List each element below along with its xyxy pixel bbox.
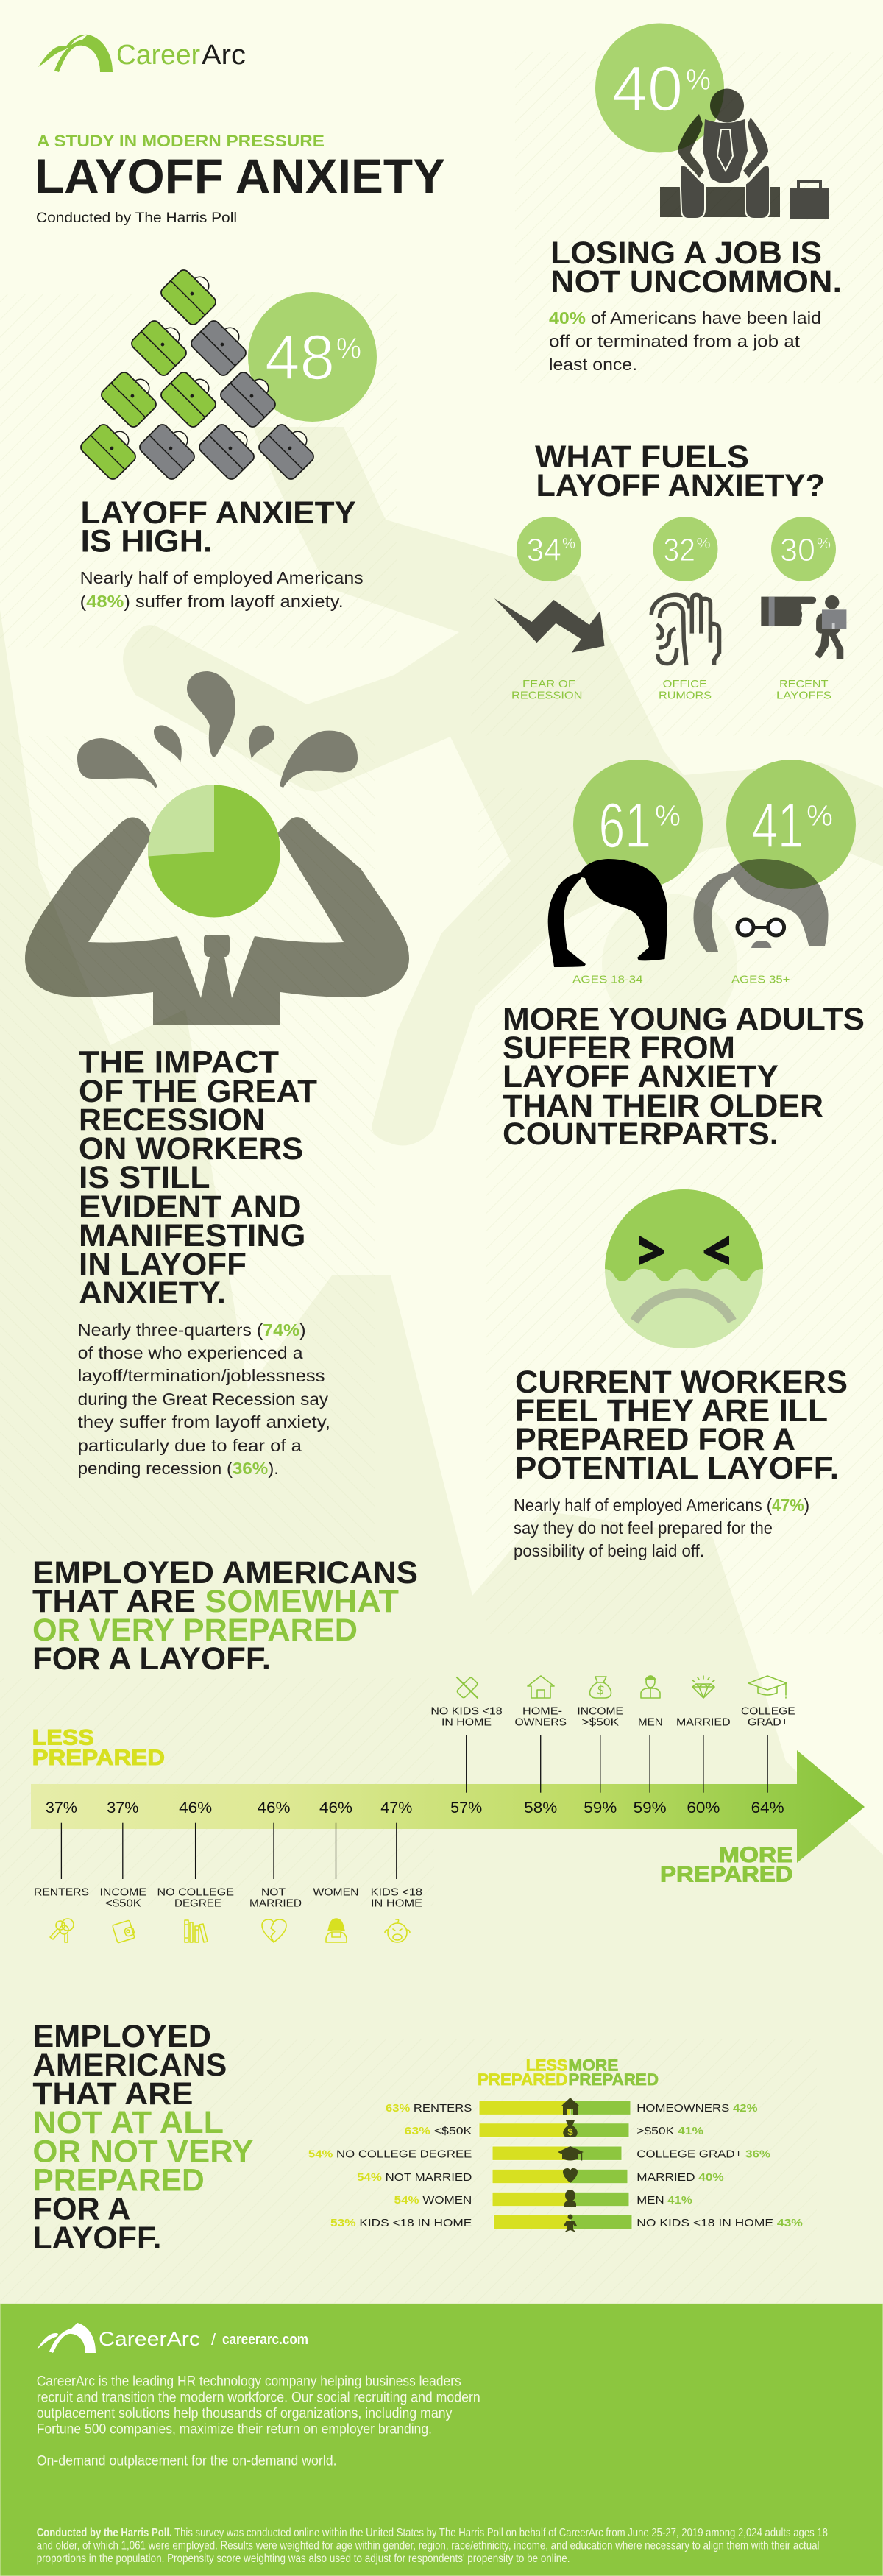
percentages: 46% — [319, 1800, 352, 1816]
upper labels: MARRIED — [676, 1716, 731, 1729]
icon grid: briefcases — [79, 263, 321, 481]
stat circle: 40%: % — [686, 64, 711, 96]
text block: layoff anxiety is high: (48%) suffer from layoff anxiety. — [80, 592, 344, 611]
text block: impact of the great recession: Nearly three-quarters ( 74%) — [78, 1320, 306, 1340]
text block: more young adults: SUFFER FROM — [503, 1031, 735, 1066]
right labels: MARRIED 40% — [636, 2171, 724, 2184]
text block: impact of the great recession: pending recession ( 36%). — [78, 1459, 279, 1478]
text block: layoff anxiety is high — [80, 496, 364, 611]
stat: office rumors 32%: OFFICE — [663, 678, 707, 690]
left labels: 54% NO COLLEGE DEGREE — [308, 2148, 472, 2161]
heading: not at all or not very prepared: PREPARED — [32, 2164, 205, 2198]
stat circle: ages 35+ 41%: % — [806, 800, 833, 832]
heading: not at all or not very prepared: OR NOT VERY — [32, 2135, 253, 2170]
figure: arms, torso and tie — [25, 817, 409, 1025]
illustration: stressed worker with pie chart head — [25, 671, 409, 1025]
text block: more young adults: MORE YOUNG ADULTS — [503, 1002, 865, 1037]
stat: recent layoffs 30% — [761, 517, 846, 702]
percentages: 59% — [634, 1800, 667, 1816]
title block: A STUDY IN MODERN PRESSURE — [37, 132, 325, 150]
stat circle: ages 35+ 41%: AGES 35+ — [731, 974, 790, 986]
icons: less prepared groups — [50, 1919, 410, 1943]
stat circle: ages 18-34 61%: 61 — [599, 790, 651, 861]
stat: fear of recession 34%: RECESSION — [511, 689, 583, 702]
logo: CareerArc: Arc — [202, 40, 246, 71]
text block: current workers: CURRENT WORKERS — [515, 1365, 848, 1400]
percentages: 37% — [107, 1800, 138, 1816]
left labels: 53% KIDS <18 IN HOME — [330, 2217, 472, 2229]
stat circle: ages 35+ 41%: 41 — [752, 790, 804, 861]
text block: losing a job: NOT UNCOMMON. — [550, 265, 842, 300]
left labels: 63% <$50K — [405, 2125, 472, 2137]
label: more prepared — [660, 1843, 793, 1887]
text block: current workers: FEEL THEY ARE ILL — [515, 1394, 828, 1429]
text block: current workers: Nearly half of employed Americans (47%) — [514, 1496, 809, 1515]
upper labels: INCOME — [577, 1705, 623, 1717]
upper labels: COLLEGE — [741, 1705, 795, 1717]
text block: impact of the great recession: EVIDENT AND — [79, 1190, 302, 1225]
footer logo: careerarc.com — [222, 2332, 308, 2348]
footer methodology note — [37, 2527, 828, 2565]
text block: losing a job: off or terminated from a job at — [549, 331, 801, 350]
footer panel — [0, 2304, 883, 2576]
heading: not at all or not very prepared: EMPLOYED — [32, 2020, 211, 2054]
upper labels: OWNERS — [515, 1716, 567, 1729]
label: less prepared: PREPARED — [32, 1746, 165, 1770]
heading: not at all or not very prepared: LAYOFF. — [32, 2221, 161, 2256]
heading: not at all or not very prepared — [32, 2020, 253, 2256]
stat: fear of recession 34% — [494, 517, 605, 702]
lower labels: KIDS <18 — [371, 1886, 422, 1899]
lower labels: NO COLLEGE — [157, 1886, 234, 1899]
lower labels: DEGREE — [174, 1897, 221, 1910]
text block: layoff anxiety is high: IS HIGH. — [81, 524, 212, 559]
upper labels: IN HOME — [442, 1716, 492, 1729]
text block: losing a job: LOSING A JOB IS — [550, 236, 822, 271]
percentages: 46% — [179, 1800, 212, 1816]
text block: impact of the great recession: they suffer from layoff anxiety, — [78, 1412, 330, 1432]
text block: losing a job — [549, 236, 842, 374]
icon: anxious face — [605, 1189, 763, 1348]
text block: impact of the great recession: particularly due to fear of a — [78, 1436, 302, 1455]
footer description — [37, 2374, 480, 2469]
right labels: >$50K 41% — [636, 2125, 703, 2137]
connector lines — [61, 1735, 767, 1879]
heading: somewhat or very prepared: THAT ARE SOMEWHAT — [32, 1585, 399, 1619]
footer logo: / — [211, 2330, 216, 2349]
bars — [479, 2101, 632, 2229]
bar icons — [558, 2098, 584, 2232]
stat: fear of recession 34%: 34 — [527, 532, 561, 568]
right labels — [636, 2102, 803, 2229]
lower labels: <$50K — [105, 1897, 141, 1910]
text block: impact of the great recession: during the Great Recession say — [78, 1390, 329, 1409]
text block: impact of the great recession: ON WORKERS — [79, 1132, 303, 1167]
text block: layoff anxiety is high: Nearly half of employed Americans — [80, 568, 364, 587]
percentages: 59% — [584, 1800, 617, 1816]
stat circle: ages 18-34 61%: AGES 18-34 — [572, 974, 643, 986]
upper labels: HOME- — [522, 1705, 562, 1717]
heading: somewhat or very prepared: OR VERY PREPARED — [32, 1613, 358, 1648]
percentages: 57% — [450, 1800, 482, 1816]
upper labels: NO KIDS <18 — [430, 1705, 503, 1717]
text block: current workers: possibility of being laid off. — [514, 1541, 704, 1560]
text block: impact of the great recession: OF THE GREAT — [79, 1075, 317, 1109]
footer description: On-demand outplacement for the on-demand world. — [37, 2453, 337, 2469]
upper labels: GRAD+ — [748, 1716, 788, 1729]
heading: what fuels layoff anxiety: WHAT FUELS — [535, 440, 749, 475]
text block: more young adults: LAYOFF ANXIETY — [503, 1060, 779, 1094]
percentages — [46, 1800, 784, 1816]
legend: PREPARED — [478, 2070, 567, 2089]
percentages: 37% — [46, 1800, 77, 1816]
title block: Conducted by The Harris Poll — [36, 210, 237, 226]
footer description: CareerArc is the leading HR technology company helping business leaders — [37, 2374, 461, 2390]
right labels: NO KIDS <18 IN HOME 43% — [636, 2217, 803, 2229]
heading: not at all or not very prepared: AMERICANS — [32, 2048, 227, 2083]
footer description: outplacement solutions help thousands of organizations, including many — [37, 2406, 453, 2421]
heading: not at all or not very prepared: THAT ARE — [32, 2077, 193, 2112]
chart: pie head — [148, 785, 280, 917]
text block: layoff anxiety is high: LAYOFF ANXIETY — [81, 496, 356, 531]
text block: more young adults — [503, 1002, 865, 1152]
stat circle: 48%: % — [336, 333, 361, 365]
text block: current workers: POTENTIAL LAYOFF. — [515, 1451, 839, 1486]
text block: current workers: say they do not feel prepared for the — [514, 1518, 773, 1538]
stat: recent layoffs 30%: 30 — [780, 532, 815, 568]
title block — [35, 132, 445, 226]
heading: somewhat or very prepared: FOR A LAYOFF. — [32, 1642, 271, 1677]
text block: impact of the great recession: of those who experienced a — [78, 1343, 303, 1362]
footer logo — [37, 2323, 308, 2353]
text block: more young adults: COUNTERPARTS. — [503, 1117, 779, 1152]
logo: CareerArc — [38, 35, 246, 72]
label: more prepared: MORE — [719, 1843, 793, 1867]
heading: somewhat or very prepared — [32, 1556, 418, 1677]
right labels: HOMEOWNERS 42% — [636, 2102, 758, 2115]
left labels — [308, 2102, 472, 2229]
label: less prepared — [32, 1726, 165, 1770]
icon: seated businessman with briefcase — [660, 88, 829, 219]
text block: current workers: PREPARED FOR A — [515, 1423, 795, 1457]
chart: diverging bars — [308, 2056, 803, 2232]
text block: impact of the great recession: IS STILL — [79, 1161, 210, 1195]
right labels: MEN 41% — [636, 2194, 692, 2207]
text block: losing a job: least once. — [549, 355, 637, 374]
text block: impact of the great recession: MANIFESTING — [79, 1219, 306, 1253]
chart: preparedness arrow — [31, 1676, 865, 1943]
percentages: 58% — [524, 1800, 557, 1816]
text block: more young adults: THAN THEIR OLDER — [503, 1089, 823, 1124]
bar icons: $ — [567, 2126, 573, 2137]
left labels: 63% RENTERS — [386, 2102, 472, 2115]
left labels: 54% NOT MARRIED — [357, 2171, 472, 2184]
footer logo: CareerArc — [99, 2328, 200, 2350]
stat: recent layoffs 30%: RECENT — [779, 678, 829, 690]
right labels: COLLEGE GRAD+ 36% — [636, 2148, 770, 2161]
stat: fear of recession 34%: FEAR OF — [522, 678, 575, 690]
label: less prepared: LESS — [32, 1726, 94, 1750]
stat circle: ages 18-34 61% — [548, 760, 703, 986]
stat circle: ages 35+ 41% — [693, 760, 856, 986]
logo: CareerArc: Career — [116, 40, 200, 71]
legend: MORE — [568, 2056, 618, 2074]
left labels: 54% WOMEN — [394, 2194, 472, 2207]
arrow — [31, 1750, 865, 1863]
text block: impact of the great recession: ANXIETY. — [79, 1276, 226, 1311]
footer description: recruit and transition the modern workforce. Our social recruiting and modern — [37, 2390, 480, 2405]
stat circle: 40%: 40 — [612, 54, 683, 124]
text block: impact of the great recession: IN LAYOFF — [79, 1248, 247, 1282]
icon: sweat drops — [77, 671, 358, 788]
legend: LESS — [526, 2056, 567, 2074]
lower labels: WOMEN — [313, 1886, 359, 1899]
upper labels: >$50K — [581, 1716, 619, 1729]
stat: recent layoffs 30%: % — [817, 536, 831, 552]
text block: losing a job: 40% of Americans have been laid — [549, 308, 821, 328]
upper labels — [430, 1705, 795, 1729]
title block: LAYOFF ANXIETY — [35, 149, 445, 203]
lower labels: IN HOME — [371, 1897, 422, 1910]
text block: current workers — [514, 1365, 848, 1560]
lower labels: RENTERS — [34, 1886, 89, 1899]
percentages: 46% — [258, 1800, 290, 1816]
text block: impact of the great recession: THE IMPACT — [79, 1045, 279, 1080]
heading: what fuels layoff anxiety — [535, 440, 825, 503]
heading: what fuels layoff anxiety: LAYOFF ANXIETY? — [536, 469, 825, 503]
lower labels: NOT — [261, 1886, 286, 1899]
stat: office rumors 32% — [651, 517, 720, 702]
footer methodology note: proportions in the population. Propensity score weighting was also used to adjust for respondents' propensity to be online. — [37, 2552, 570, 2565]
text block: impact of the great recession: RECESSION — [79, 1103, 265, 1138]
stat circle: 48% — [248, 292, 377, 422]
icons: more prepared groups — [456, 1676, 787, 1699]
heading: not at all or not very prepared: NOT AT ALL — [32, 2106, 224, 2140]
legend — [478, 2056, 659, 2089]
heading: not at all or not very prepared: FOR A — [32, 2193, 130, 2227]
stat: office rumors 32%: 32 — [664, 532, 695, 568]
stat: recent layoffs 30%: LAYOFFS — [776, 689, 831, 702]
stat: office rumors 32%: % — [697, 536, 711, 552]
text block: impact of the great recession: layoff/termination/joblessness — [78, 1366, 325, 1385]
stat circle: 40% — [595, 24, 724, 153]
upper labels: MEN — [638, 1716, 663, 1729]
stat circle: 48%: 48 — [265, 322, 335, 393]
stat circle: ages 18-34 61%: % — [655, 800, 681, 832]
lower labels — [34, 1886, 422, 1910]
text block: impact of the great recession — [78, 1045, 330, 1478]
percentages: 47% — [380, 1800, 412, 1816]
label: more prepared: PREPARED — [660, 1863, 793, 1887]
stat: fear of recession 34%: % — [562, 536, 575, 552]
heading: somewhat or very prepared: EMPLOYED AMERICANS — [32, 1556, 418, 1590]
footer description: Fortune 500 companies, maximize their return on employer branding. — [37, 2422, 432, 2438]
percentages: 60% — [687, 1800, 720, 1816]
stat: office rumors 32%: RUMORS — [659, 689, 712, 702]
lower labels: INCOME — [100, 1886, 146, 1899]
legend: PREPARED — [568, 2070, 659, 2089]
lower labels: MARRIED — [249, 1897, 302, 1910]
percentages: 64% — [751, 1800, 784, 1816]
